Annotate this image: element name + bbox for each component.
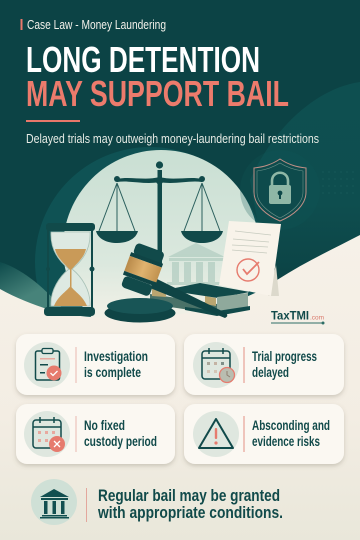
- icon: bank building: [31, 479, 77, 525]
- icon: gavel on sound block: [104, 242, 227, 322]
- card text: No fixed: [84, 417, 125, 433]
- backdrop circle behind scales: [63, 150, 259, 346]
- card text: is complete: [84, 364, 141, 380]
- conclusion text: Regular bail may be granted: [98, 486, 280, 505]
- dark teal header background: [0, 0, 360, 377]
- card text: [252, 348, 317, 380]
- logo: TaxTMI.com: TaxTMI: [271, 308, 309, 322]
- logo: TaxTMI.com: .com: [310, 314, 324, 322]
- card text: [252, 417, 330, 449]
- card: no fixed custody period: [16, 404, 175, 464]
- card: absconding and evidence risks: [184, 404, 344, 464]
- card text: [84, 417, 157, 449]
- category label: Case Law - Money Laundering: [27, 18, 166, 32]
- card text: evidence risks: [252, 433, 320, 449]
- card text: custody period: [84, 433, 157, 449]
- title: [26, 39, 289, 114]
- icon: stacked law books: [150, 283, 250, 316]
- conclusion text: [97, 486, 283, 522]
- conclusion strip: [31, 479, 283, 525]
- logo: TaxTMI.com: [271, 308, 324, 324]
- icon: scales of justice: [96, 161, 223, 265]
- icon: clipboard with check: [24, 342, 70, 388]
- card text: delayed: [252, 364, 289, 380]
- icon: hourglass: [44, 223, 95, 316]
- title: LONG DETENTION: [26, 39, 260, 80]
- cream lower page background: [0, 235, 360, 540]
- icon: document with check mark: [219, 221, 281, 296]
- card text: Absconding and: [252, 417, 330, 433]
- card text: Trial progress: [252, 348, 317, 364]
- conclusion text: with appropriate conditions.: [97, 503, 283, 522]
- card text: Investigation: [84, 348, 148, 364]
- card: trial progress delayed: [184, 334, 344, 395]
- icon: calendar with cross: [24, 411, 70, 457]
- icon: faded courthouse: [167, 243, 227, 285]
- icon: shield with padlock: [240, 150, 320, 230]
- card: investigation is complete: [16, 334, 175, 395]
- icon: calendar with clock: [193, 342, 239, 388]
- icon: warning triangle: [193, 411, 239, 457]
- dot pattern: [322, 171, 354, 194]
- accent rule: [26, 120, 80, 122]
- card text: [84, 348, 148, 380]
